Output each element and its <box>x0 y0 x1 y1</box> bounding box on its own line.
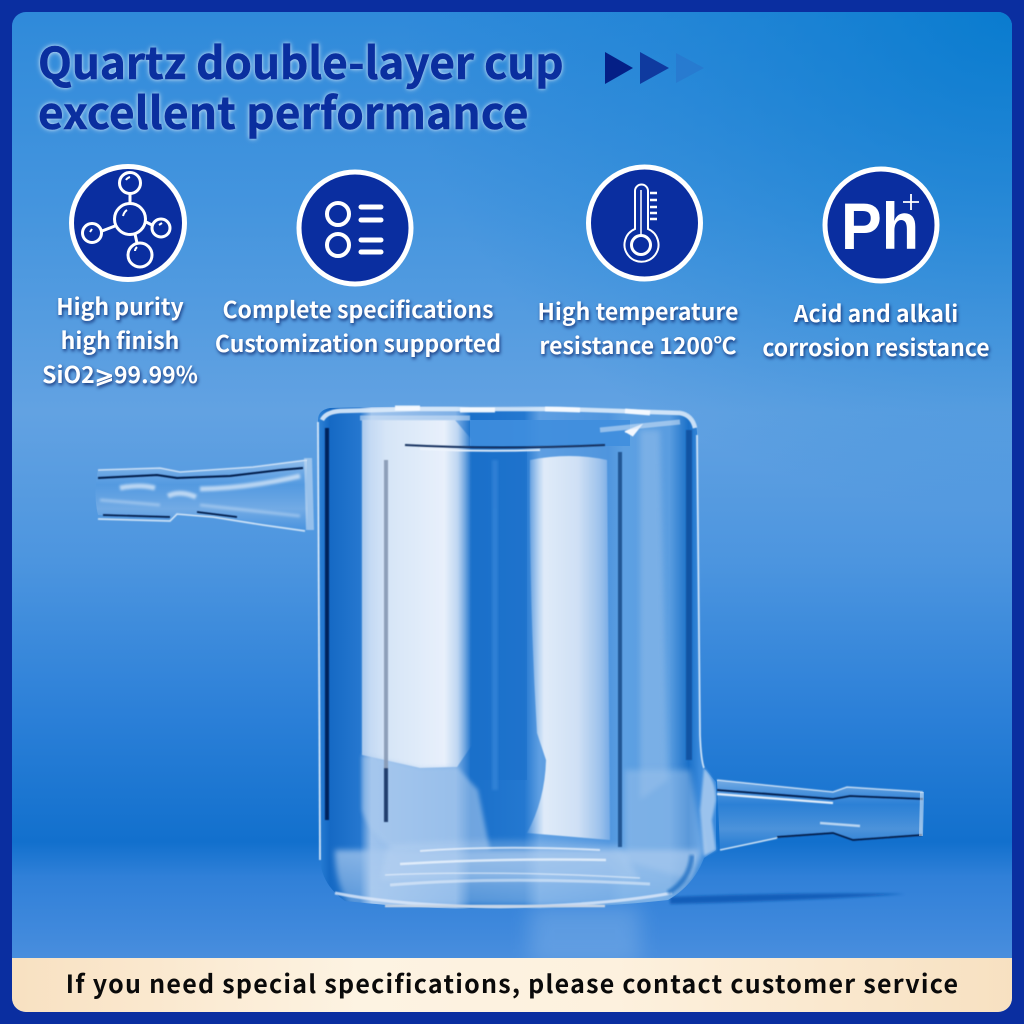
label: high purity: High purity <box>56 288 184 322</box>
label: acid and alkali <box>686 295 992 418</box>
icon: pH: Ph <box>841 189 919 263</box>
right tube <box>717 780 924 850</box>
left highlight band <box>362 420 472 768</box>
label: high purity <box>42 288 686 418</box>
label: high purity: high finish <box>61 322 179 356</box>
title: excellent performance <box>38 78 529 142</box>
icon: list <box>296 170 414 286</box>
icon: thermometer <box>586 164 703 282</box>
arrows <box>605 52 704 84</box>
label: high temperature: High temperature <box>538 293 738 327</box>
cup shadow <box>670 893 905 904</box>
label: high temperature: resistance 1200℃ <box>539 327 737 361</box>
soft streaks <box>640 430 668 800</box>
base ripples <box>335 848 672 907</box>
right highlight band <box>527 456 610 840</box>
junction glints <box>700 768 716 856</box>
label: complete specifications: Customization supported <box>215 325 501 359</box>
icon: pH <box>822 166 940 284</box>
title <box>36 28 566 142</box>
banner text: If you need special specifications, please contact customer service <box>66 965 959 1001</box>
base glass <box>335 850 700 905</box>
label: high purity: SiO2⩾99.99% <box>42 356 198 390</box>
label: complete specifications <box>215 291 686 418</box>
title: Quartz double-layer cup <box>38 28 564 92</box>
banner <box>0 958 1024 1012</box>
glass cup <box>96 407 924 909</box>
dark wall lines <box>318 422 704 860</box>
left tube <box>96 458 314 531</box>
band across top of inner cup <box>470 420 630 446</box>
lower left reflection <box>362 755 490 850</box>
rim <box>322 408 695 436</box>
label: high temperature <box>538 293 740 418</box>
label: complete specifications: Complete specifications <box>222 291 494 325</box>
label: acid and alkali: Acid and alkali <box>794 295 958 329</box>
icon: molecule <box>69 164 187 282</box>
label: acid and alkali: corrosion resistance <box>762 329 990 363</box>
cup body <box>318 407 716 909</box>
